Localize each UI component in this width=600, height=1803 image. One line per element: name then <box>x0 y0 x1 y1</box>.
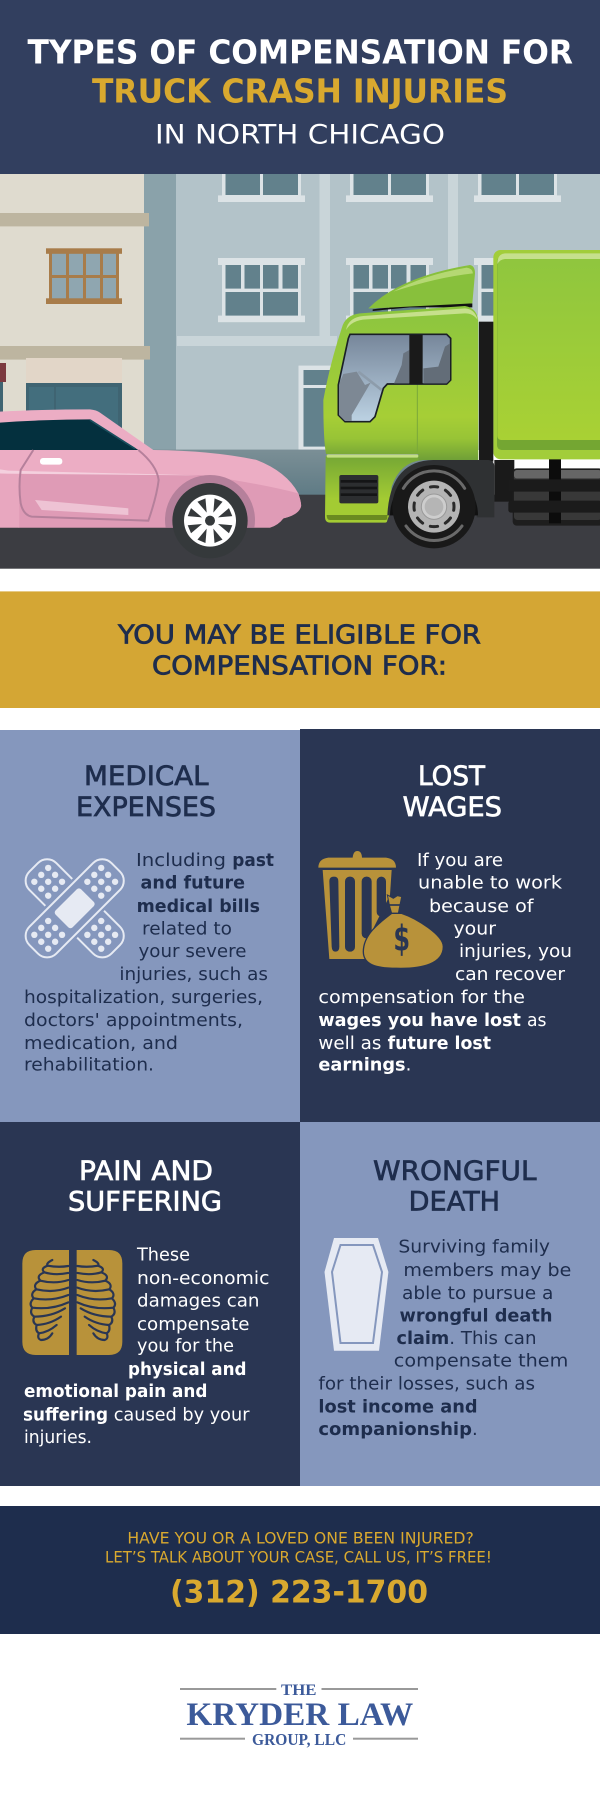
gray building <box>176 174 600 450</box>
panel: pain and suffering <box>0 1122 300 1486</box>
icon: coffin <box>324 1238 388 1351</box>
text: wrongful death: compensate them <box>394 1351 568 1372</box>
heading: pain and suffering: PAIN AND <box>79 1156 213 1187</box>
text: wrongful death: wrongful death <box>400 1306 552 1327</box>
text: wrongful death: for their losses, such as <box>318 1373 535 1394</box>
text: lost wages: If you are <box>417 850 503 871</box>
road <box>0 495 600 569</box>
text: lost wages: unable to work <box>418 872 563 894</box>
text: lost wages: well as <box>318 1033 381 1054</box>
truck bumper <box>325 454 423 523</box>
logo: GROUP, LLC <box>252 1730 346 1749</box>
text: medical expenses: past <box>232 850 274 871</box>
text: pain and suffering: caused by your <box>114 1405 250 1426</box>
text: medical expenses: hospitalization, surgeries, <box>24 987 263 1008</box>
heading: medical expenses <box>76 761 216 823</box>
call to action text: LET’S TALK ABOUT YOUR CASE, CALL US, IT’S FREE! <box>105 1547 492 1566</box>
text: medical expenses: and future <box>140 872 245 894</box>
title line 1: TYPES OF COMPENSATION FOR <box>28 34 573 72</box>
text: pain and suffering: compensate <box>137 1314 250 1335</box>
spoiler <box>368 265 475 311</box>
text: pain and suffering: you for the <box>137 1336 234 1357</box>
heading: wrongful death: WRONGFUL <box>373 1156 536 1187</box>
text: medical expenses: your severe <box>138 941 246 962</box>
text: lost wages: your <box>454 919 497 940</box>
text: lost wages: wages you have lost <box>318 1010 521 1031</box>
heading: lost wages: LOST <box>418 761 485 792</box>
text: pain and suffering: These <box>136 1245 190 1266</box>
heading: lost wages: WAGES <box>403 792 502 823</box>
panel: wrongful death <box>300 1122 600 1486</box>
heading: pain and suffering: SUFFERING <box>68 1187 222 1218</box>
truck undercarriage <box>494 458 600 526</box>
icon: trash can and money bag: $ <box>393 919 410 960</box>
text: pain and suffering <box>23 1245 269 1448</box>
text: pain and suffering: injuries. <box>24 1427 92 1448</box>
icon: rib cage <box>22 1250 122 1355</box>
call to action text: HAVE YOU OR A LOVED ONE BEEN INJURED? <box>127 1528 474 1547</box>
beige building <box>0 174 150 474</box>
pink car <box>0 409 301 558</box>
text: medical expenses: doctors' appointments, <box>24 1010 243 1031</box>
cargo box <box>493 250 600 459</box>
cab window <box>338 334 451 422</box>
header panel <box>0 0 600 174</box>
text: medical expenses <box>24 850 274 1076</box>
text: pain and suffering: non-economic <box>137 1268 269 1289</box>
call to action panel <box>0 1506 600 1634</box>
text: wrongful death: lost income and <box>318 1397 478 1418</box>
text: wrongful death <box>318 1237 571 1440</box>
brown framed window <box>46 248 122 304</box>
panel: lost wages <box>300 729 600 1122</box>
truck wheel <box>392 465 476 548</box>
street illustration <box>0 174 600 569</box>
heading: medical expenses: MEDICAL <box>84 761 209 792</box>
text: medical expenses: Including <box>136 850 226 871</box>
banner text <box>117 621 481 682</box>
text: wrongful death: companionship <box>318 1419 472 1440</box>
text: pain and suffering: suffering <box>23 1405 108 1426</box>
text: medical expenses: injuries, such as <box>119 964 268 985</box>
wheel arch <box>387 460 494 517</box>
heading: lost wages <box>403 761 502 823</box>
text: lost wages <box>318 850 572 1076</box>
text: wrongful death: Surviving family <box>398 1237 550 1258</box>
title line 2: TRUCK CRASH INJURIES <box>92 72 508 110</box>
text: lost wages: . <box>406 1055 411 1076</box>
text: pain and suffering: damages can <box>137 1291 260 1312</box>
text: wrongful death: members may be <box>403 1260 571 1281</box>
heading: wrongful death <box>373 1156 536 1218</box>
banner text: COMPENSATION FOR: <box>152 652 447 682</box>
text: lost wages: earnings <box>318 1055 406 1076</box>
text: lost wages: because of <box>429 896 534 917</box>
icon: bandage <box>20 854 129 963</box>
logo: THE <box>281 1682 316 1699</box>
text: wrongful death: . <box>472 1419 478 1440</box>
text: lost wages: future lost <box>388 1033 491 1054</box>
text: lost wages: as <box>527 1010 546 1031</box>
text: medical expenses: rehabilitation. <box>24 1055 154 1076</box>
text: wrongful death: . This can <box>449 1328 536 1349</box>
text: pain and suffering: physical and <box>128 1359 246 1380</box>
heading: pain and suffering <box>68 1156 222 1218</box>
text: medical expenses: medication, and <box>24 1033 178 1054</box>
text: medical expenses: medical bills <box>137 896 260 917</box>
phone number: (312) 223-1700 <box>170 1575 428 1611</box>
text: lost wages: compensation for the <box>318 987 525 1008</box>
panel: medical expenses <box>0 730 300 1122</box>
icon: trash can and money bag <box>318 851 443 968</box>
title line 3: IN NORTH CHICAGO <box>155 120 445 150</box>
text: medical expenses: related to <box>142 919 232 940</box>
grille <box>339 475 378 503</box>
text: pain and suffering: emotional pain and <box>24 1381 207 1402</box>
logo <box>180 1682 418 1749</box>
heading: wrongful death: DEATH <box>409 1187 500 1218</box>
side wall <box>144 174 176 450</box>
logo: KRYDER LAW <box>186 1697 413 1733</box>
green truck <box>323 250 600 548</box>
text: lost wages: can recover <box>455 964 566 985</box>
call to action text <box>105 1528 492 1566</box>
pavement <box>150 450 450 495</box>
truck cab <box>323 306 478 460</box>
gold banner <box>0 591 600 708</box>
text: wrongful death: claim <box>396 1328 449 1349</box>
heading: medical expenses: EXPENSES <box>76 792 216 823</box>
banner text: YOU MAY BE ELIGIBLE FOR <box>117 621 481 651</box>
text: lost wages: injuries, you <box>459 941 572 962</box>
car wheel <box>172 483 248 558</box>
text: wrongful death: able to pursue a <box>402 1283 553 1304</box>
